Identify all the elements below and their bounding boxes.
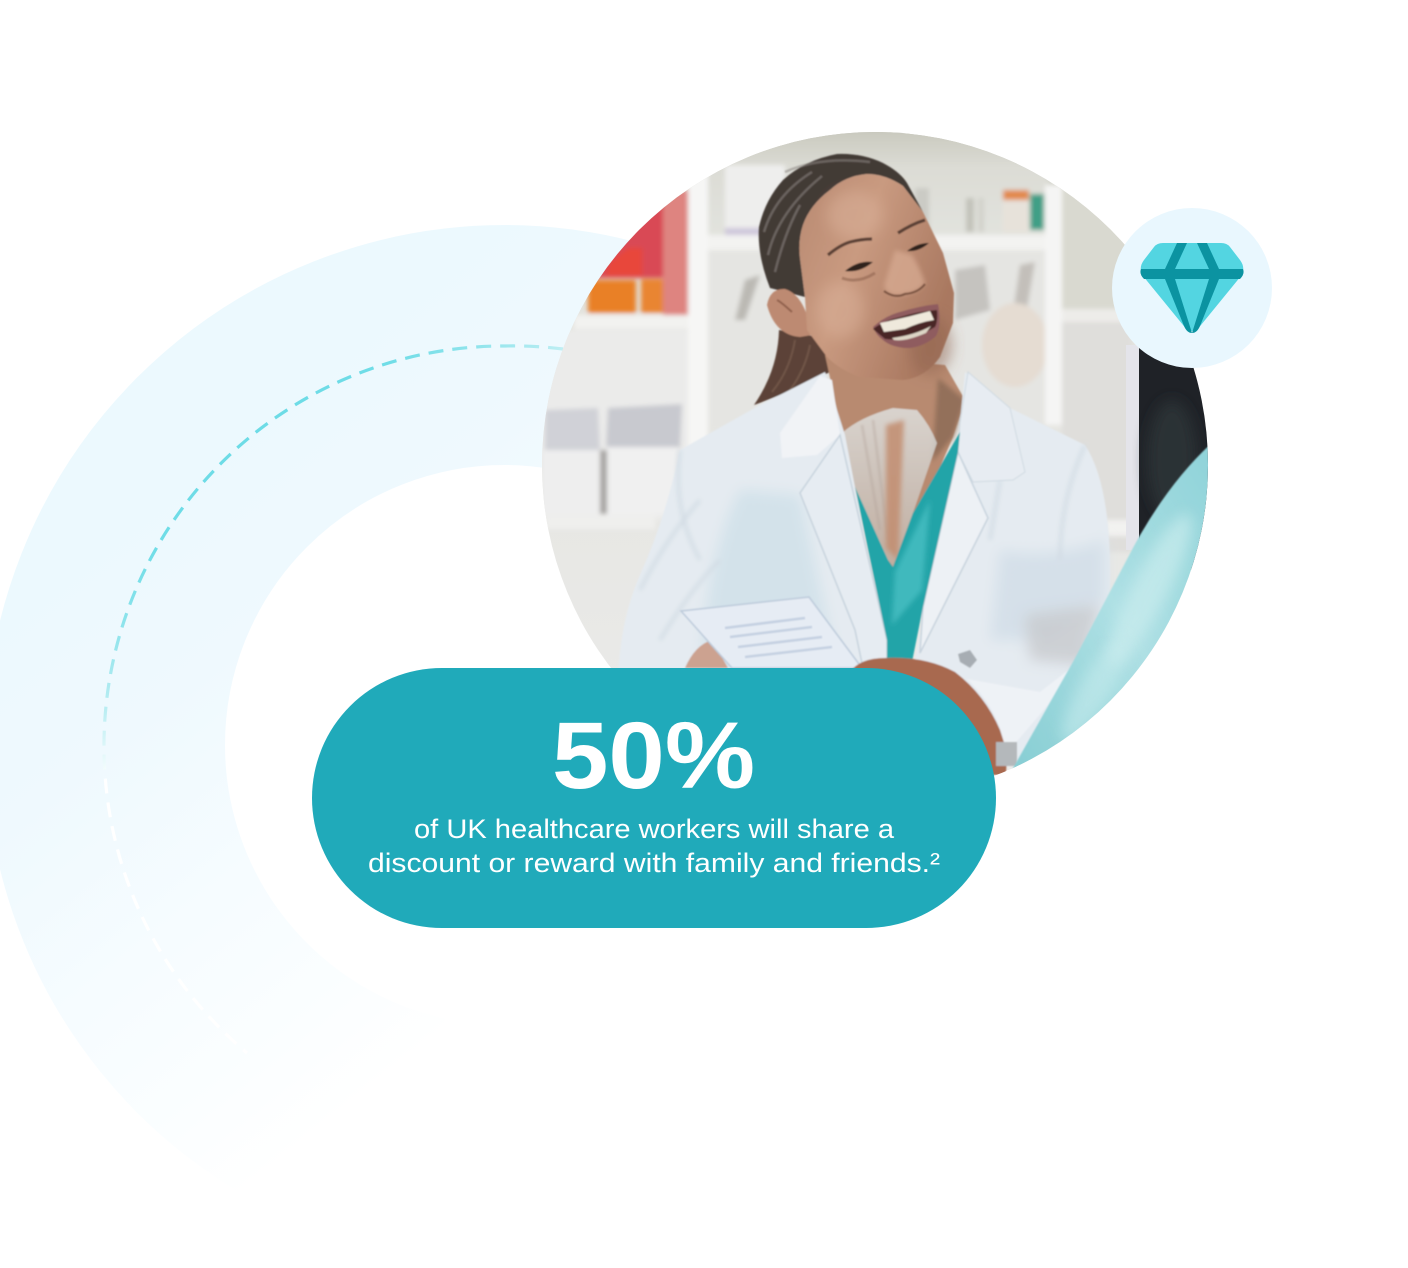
clip on coat pocket [958, 650, 977, 668]
head and face [767, 174, 954, 380]
clear plastic bag of papers [681, 597, 862, 668]
description text: discount or reward with family and friends.² [368, 848, 940, 878]
left collar and lapel [780, 376, 887, 668]
small bottles [1024, 204, 1025, 206]
ponytail and hair [754, 154, 923, 405]
blurred equipment on wall [735, 275, 760, 320]
circular photo: healthcare worker laughing [540, 130, 1215, 775]
person [618, 154, 1110, 775]
big statistic: 50% [552, 703, 755, 809]
hand holding papers [685, 640, 728, 668]
icon badge: diamond [1112, 208, 1272, 368]
white storage bins with papers [545, 408, 600, 450]
icon: diamond [1140, 243, 1244, 333]
photo background: shelves [540, 130, 1213, 770]
nose [884, 250, 925, 296]
laughing mouth [873, 304, 940, 348]
teal scrub top [855, 432, 960, 662]
eyebrows [828, 220, 925, 255]
description text [368, 814, 940, 878]
coat cuff [971, 673, 1066, 741]
dashed arc line [104, 346, 563, 1053]
white box on shelf [725, 165, 785, 235]
orange bottles [588, 280, 636, 313]
callout pill [312, 668, 996, 928]
blurred foreground shoulder in teal [1012, 440, 1215, 770]
neck and chest [825, 355, 965, 572]
white lab coat [618, 372, 1110, 760]
description text: of UK healthcare workers will share a [414, 814, 895, 844]
right collar and lapel [920, 372, 1025, 653]
red binders [598, 206, 666, 282]
watch [996, 742, 1017, 766]
dark monitor [1126, 340, 1213, 570]
forearm and hand [850, 658, 1007, 775]
white shelves [688, 172, 708, 472]
eyes [842, 243, 929, 280]
background ring arc [105, 345, 640, 1136]
